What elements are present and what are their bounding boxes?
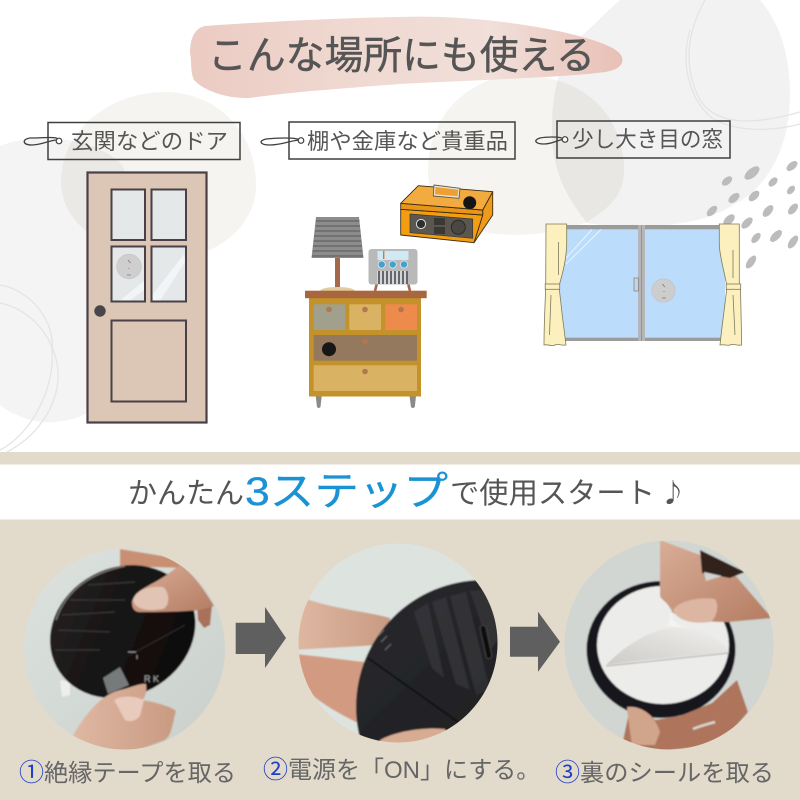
left curtain <box>544 224 567 346</box>
step 2 caption: 電源を「ON」にする。 <box>288 757 540 784</box>
title brush stroke <box>190 17 622 98</box>
background blobs <box>0 0 800 452</box>
door illustration <box>88 172 206 422</box>
heading: three easy steps: で使用スタート <box>450 477 655 510</box>
heading: three easy steps: 3ステップ <box>245 470 448 514</box>
label: entrance door <box>24 122 240 160</box>
cash box illustration <box>401 185 493 243</box>
alarm device on door <box>117 254 141 279</box>
step section background <box>0 452 800 800</box>
cash box front <box>401 209 483 243</box>
chest top <box>305 291 427 298</box>
title <box>190 17 622 98</box>
photo 3: remove the backing seal <box>560 535 780 755</box>
device ring <box>586 581 736 718</box>
upper hand <box>660 540 772 622</box>
step 3 caption: 裏のシールを取る <box>580 760 774 787</box>
step 1 caption: 絶縁テープを取る <box>44 760 236 787</box>
label: shelves and safes: 棚や金庫など貴重品 <box>307 129 508 154</box>
window frame <box>560 225 725 341</box>
lower hand <box>620 680 748 755</box>
cash box lid top <box>401 186 493 210</box>
chest body <box>309 298 421 396</box>
cash box right side <box>474 192 493 243</box>
right curtain <box>719 224 742 345</box>
arrow 1 <box>236 607 286 668</box>
photo 2: turn the power on <box>298 544 498 742</box>
cash box handle <box>433 185 460 198</box>
chest of drawers illustration <box>305 217 427 408</box>
door knob <box>94 305 106 317</box>
label: larger window <box>536 121 730 158</box>
cash box lid front <box>401 203 483 215</box>
thumb <box>132 565 214 612</box>
heading: three easy steps: ♪ <box>660 473 686 510</box>
chest legs <box>316 396 416 408</box>
radio <box>368 249 418 291</box>
title text: こんな場所にも使える <box>208 35 595 78</box>
step 1 caption: ① <box>19 759 44 787</box>
label: entrance door: 玄関などのドア <box>71 129 228 154</box>
window illustration <box>544 224 742 346</box>
dot pattern <box>705 159 800 270</box>
drawers <box>314 304 417 391</box>
black device on box <box>463 196 476 209</box>
door lower panel <box>112 320 186 402</box>
step 2 caption: ② <box>263 756 288 784</box>
photo 1: remove insulation tape <box>24 548 225 750</box>
heading: three easy steps <box>128 470 686 514</box>
tape <box>103 667 129 694</box>
window alarm device <box>652 279 675 302</box>
black alarm device on chest <box>322 342 336 356</box>
cash box lock panel <box>410 214 473 238</box>
heading: three easy steps: かんたん <box>128 478 244 510</box>
window glass <box>560 229 638 338</box>
lower hand <box>72 684 176 755</box>
label: shelves and safes <box>261 122 515 159</box>
step 3 caption: ③ <box>555 759 580 787</box>
lamp <box>312 217 364 295</box>
peeled flap <box>606 631 726 666</box>
label: larger window: 少し大き目の窓 <box>572 127 723 152</box>
arrow 2 <box>510 612 560 672</box>
door glass panes <box>112 190 186 302</box>
photo 1: remove insulation tape: R K <box>144 674 159 684</box>
